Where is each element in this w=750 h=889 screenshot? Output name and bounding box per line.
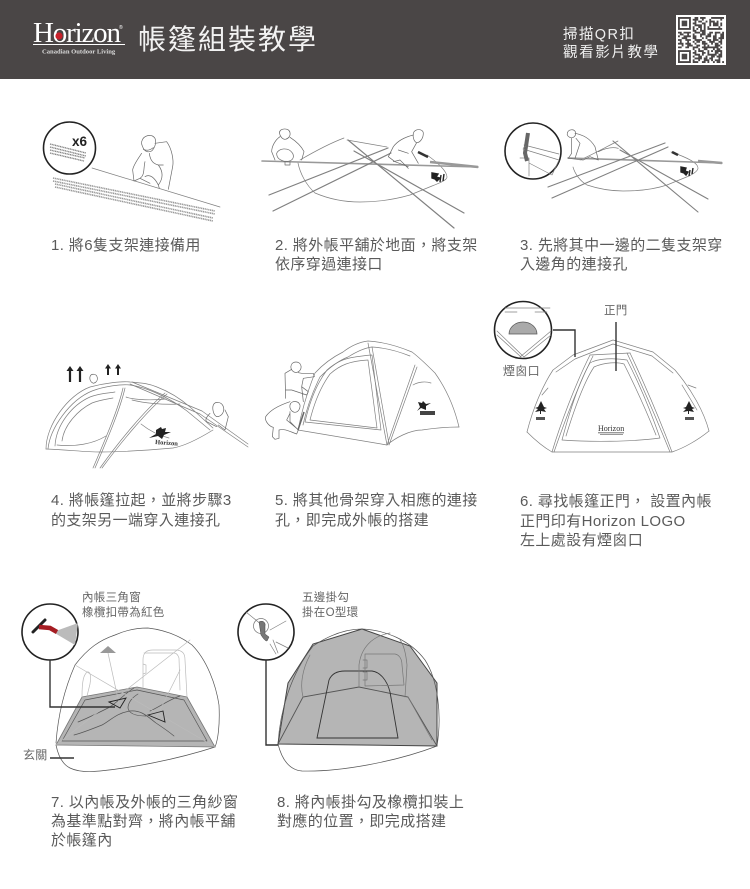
step 2 text: 2. 將外帳平舖於地面，將支架 xyxy=(275,236,478,254)
QR code xyxy=(676,15,726,65)
step 4 text: 4. 將帳篷拉起，並將步驟3 xyxy=(51,492,232,509)
title: 帳篷組裝教學 xyxy=(138,24,318,55)
step 5 text: 5. 將其他骨架穿入相應的連接 xyxy=(275,491,478,509)
arrows: lift up xyxy=(66,364,121,382)
illustration: raising tent: Horizon xyxy=(155,439,178,448)
QR caption: 掃描QR扣 xyxy=(563,25,635,43)
step 2 text xyxy=(275,236,478,273)
step 6 text: 正門印有Horizon LOGO xyxy=(520,513,686,530)
step 8 text xyxy=(277,794,464,830)
label: inner triangle window: 橡欖扣帶為紅色 xyxy=(82,605,165,619)
QR caption xyxy=(563,25,660,61)
step 7 text: 於帳篷內 xyxy=(51,832,113,849)
logo: Horizon: ® xyxy=(119,24,123,31)
illustration: inner tent floor xyxy=(56,628,219,772)
illustration: inner tent hung xyxy=(278,629,439,771)
step 6 text xyxy=(520,493,712,549)
panel: step 2 xyxy=(262,129,478,273)
step 2 text: 依序穿過連接口 xyxy=(275,256,383,273)
illustration: tent front view: Horizon xyxy=(598,424,624,433)
label: inner triangle window: 內帳三角窗 xyxy=(82,590,141,604)
step 5 text: 孔，即完成外帳的搭建 xyxy=(275,512,429,529)
step 3 text: 入邊角的連接孔 xyxy=(520,256,628,273)
step 3 text: 3. 先將其中一邊的二隻支架穿 xyxy=(520,237,723,254)
label: five side hooks: 五邊掛勾 xyxy=(302,590,349,604)
inset circle: red strap xyxy=(22,604,115,707)
logo: Horizon: Canadian Outdoor Living xyxy=(42,48,116,56)
illustration: poles and person xyxy=(548,130,722,212)
step 6 text: 6. 尋找帳篷正門， 設置內帳 xyxy=(520,493,712,510)
inset circle: x6 poles: x6 xyxy=(72,134,88,149)
step 1 text: 1. 將6隻支架連接備用 xyxy=(51,237,201,254)
step 4 text xyxy=(51,492,232,529)
step 8 text: 對應的位置，即完成搭建 xyxy=(277,812,446,830)
step 5 text xyxy=(275,491,478,529)
inset circle: hook on O ring xyxy=(238,604,294,745)
step 6 text: 左上處設有煙囪口 xyxy=(520,532,643,549)
illustration: raising tent xyxy=(46,374,248,468)
panel: step 5 xyxy=(265,341,478,529)
QR caption: 觀看影片教學 xyxy=(563,43,660,61)
panel: step 1 xyxy=(44,122,220,254)
panel: step 6 xyxy=(494,302,712,549)
callout: smoke vent inset xyxy=(494,302,575,358)
label: entrance xyxy=(23,747,74,762)
step 7 text xyxy=(51,794,238,849)
panel: step 3 xyxy=(505,123,723,273)
label: entrance: 玄關 xyxy=(23,747,48,762)
label: five side hooks xyxy=(302,590,359,619)
label: front door: 正門 xyxy=(604,304,628,317)
header bar xyxy=(0,0,750,79)
label: smoke vent: 煙囪口 xyxy=(503,364,540,378)
label: five side hooks: 掛在O型環 xyxy=(302,605,359,619)
step 7 text: 7. 以內帳及外帳的三角紗窗 xyxy=(51,794,238,811)
step 3 text xyxy=(520,237,723,273)
step 4 text: 的支架另一端穿入連接孔 xyxy=(51,512,220,529)
step 7 text: 為基準點對齊，將內帳平舖 xyxy=(51,812,236,830)
inset circle: corner connector xyxy=(505,123,561,179)
panel: step 8 xyxy=(238,590,464,830)
illustration: poles and person xyxy=(53,135,220,221)
step 8 text: 8. 將內帳掛勾及橡欖扣裝上 xyxy=(277,794,464,811)
illustration: tent front view xyxy=(527,340,709,452)
inset circle: x6 poles xyxy=(44,122,96,174)
illustration: tent poles and two people xyxy=(262,129,478,228)
label: front door xyxy=(604,304,628,371)
panel: step 4 xyxy=(46,364,248,529)
logo: Horizon: Horizon xyxy=(33,17,122,49)
panel: step 7 xyxy=(22,590,238,849)
label: inner triangle window xyxy=(82,590,165,619)
illustration: tent erected xyxy=(265,341,459,445)
